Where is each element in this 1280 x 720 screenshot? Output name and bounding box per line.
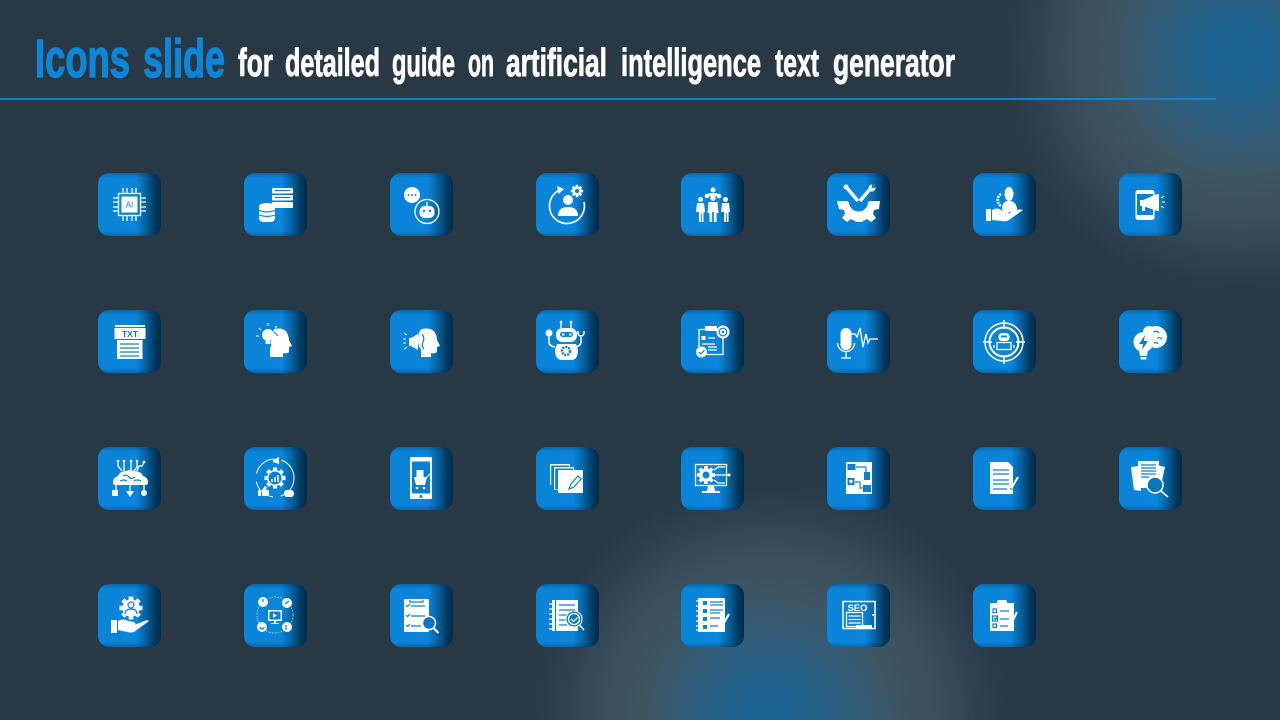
- title: guide: [392, 42, 455, 85]
- icon tile: gear chart cycle: [244, 447, 307, 510]
- icon tile: clipboard with target: [681, 310, 744, 373]
- title: slide: [143, 29, 225, 89]
- title: [35, 29, 955, 89]
- icon tile: phone with megaphone: [1119, 173, 1182, 236]
- icon tile: SEO page: [827, 584, 890, 647]
- icon tile: person cycle with gear: [536, 173, 599, 236]
- icon tile: brain with data flows: [98, 447, 161, 510]
- icon tile: process flow document: [827, 447, 890, 510]
- background glow: bottom centre: [530, 480, 1010, 720]
- icon tile: phone with shopping cart: [390, 447, 453, 510]
- icon tile: database and server: [244, 173, 307, 236]
- icon tile: clipboard with magnifier: [390, 584, 453, 647]
- icon tile: chat and robot: [390, 173, 453, 236]
- title: detailed: [285, 42, 380, 85]
- icon tile: monitor with gear circuits: [681, 447, 744, 510]
- icon tile: head with sound: [390, 310, 453, 373]
- icon tile: head with light bulb: [244, 310, 307, 373]
- icon tile: monitor with social bubbles: [244, 584, 307, 647]
- icon tile: clipboard checklist with pen: [973, 584, 1036, 647]
- icon tile: notebook with magnifier: [536, 584, 599, 647]
- background glow: top right: [1000, 0, 1280, 295]
- icon tile: document with pen: [973, 447, 1036, 510]
- icon tile: AI chip: [98, 173, 161, 236]
- icon tile: papers with magnifier: [1119, 447, 1182, 510]
- icon tile: robot in target: [973, 310, 1036, 373]
- icon tile: robot with gear: [536, 310, 599, 373]
- icon tile: AI chip: AI: [126, 200, 133, 210]
- title: generator: [833, 42, 955, 85]
- title: on: [468, 42, 494, 85]
- icon tile: stacked pages with pencil: [536, 447, 599, 510]
- icon tile: team of people: [681, 173, 744, 236]
- icon tile: SEO page: SEO: [847, 603, 868, 614]
- title: artificial: [506, 42, 607, 85]
- icon tile: TXT document: [98, 310, 161, 373]
- icon tile: TXT document: TXT: [122, 329, 139, 339]
- title: text: [775, 42, 819, 85]
- title: for: [238, 42, 273, 85]
- icon tile: hand holding person: [973, 173, 1036, 236]
- icon tile: checklist notebook with pen: [681, 584, 744, 647]
- title rule: [0, 98, 1216, 100]
- title: intelligence: [621, 42, 761, 85]
- icon tile: microphone with waveform: [827, 310, 890, 373]
- icon tile: bulb and brain: [1119, 310, 1182, 373]
- icon tile: tools and gear: [827, 173, 890, 236]
- title: Icons: [35, 29, 130, 89]
- icon tile: hand holding gear person: [98, 584, 161, 647]
